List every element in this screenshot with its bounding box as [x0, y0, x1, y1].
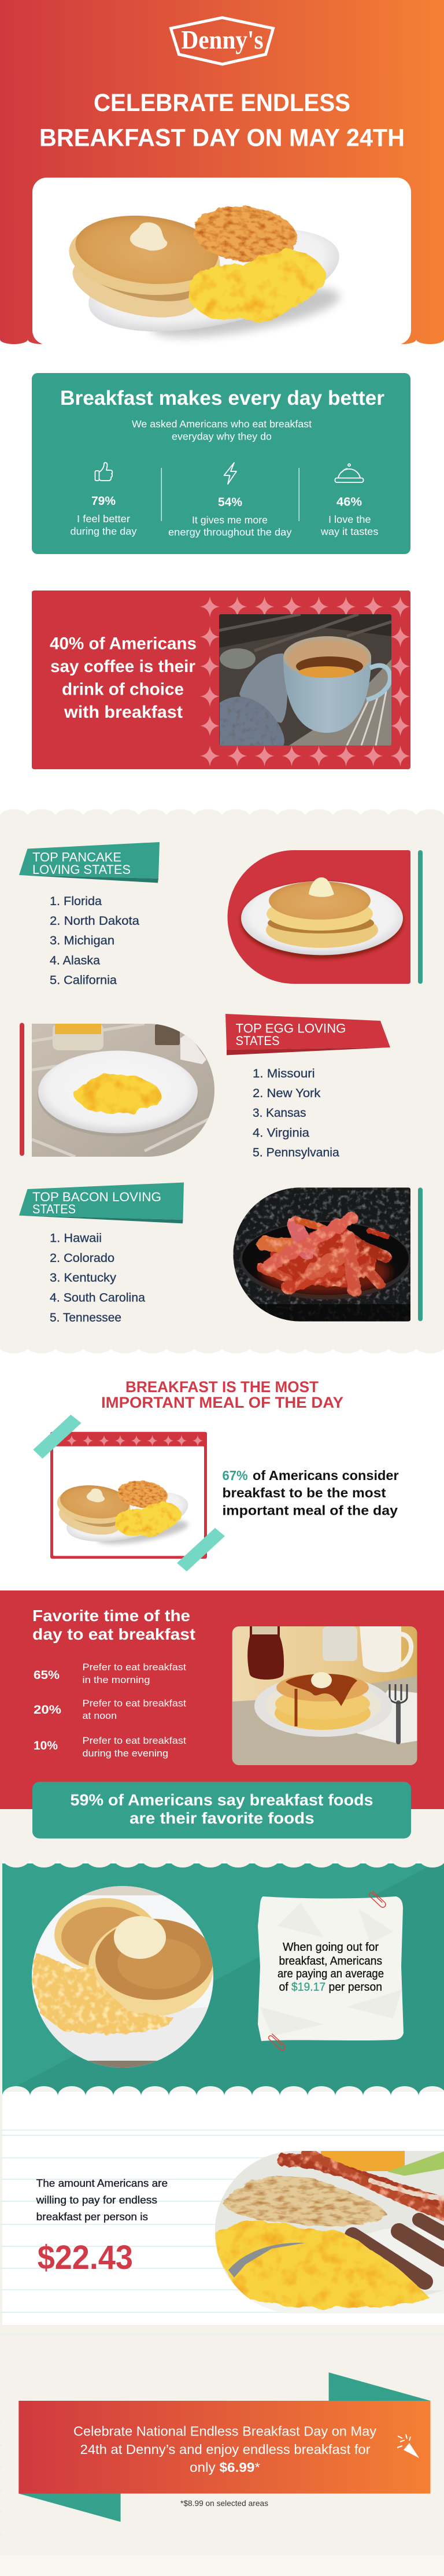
- white scallops on bottom edge: [2, 2086, 444, 2105]
- ribbon text: Celebrate National Endless Breakfast Day on May: [73, 2423, 376, 2438]
- card heading: Breakfast makes every day better: [60, 387, 384, 409]
- stat: 54%: [168, 496, 292, 538]
- panel: hero header: [0, 0, 444, 350]
- stat: 54%: It gives me more: [192, 514, 268, 526]
- teal background: [2, 1863, 444, 2101]
- list: egg states: 3. Kansas: [253, 1106, 306, 1120]
- ribbon fold: bottom left: [18, 2494, 121, 2522]
- section heading: day to eat breakfast: [32, 1625, 195, 1643]
- list: bacon states: [50, 1232, 145, 1324]
- banner: top pancake loving states: LOVING STATES: [32, 862, 131, 877]
- card background: [32, 591, 410, 769]
- stat: 65% morning: Prefer to eat breakfast: [82, 1662, 186, 1673]
- price: $22.43: $22.43: [38, 2239, 133, 2276]
- stat: 10% evening: Prefer to eat breakfast: [82, 1736, 186, 1746]
- callout text: say coffee is their: [50, 657, 195, 676]
- logo: Denny's: [171, 17, 273, 64]
- icon: thumbs up: [95, 463, 112, 481]
- banner: top egg loving states: [225, 1014, 390, 1055]
- frame inner area: [53, 1446, 204, 1556]
- text: 67% of Americans: breakfast to be the most: [222, 1485, 386, 1500]
- list: pancake states: 3. Michigan: [50, 934, 114, 947]
- note: torn paper card: breakfast, Americans: [279, 1955, 382, 1968]
- panel: framed breakfast photo: [33, 1415, 225, 1571]
- title: CELEBRATE ENDLESS: [94, 89, 350, 117]
- list: egg states: 1. Missouri: [253, 1067, 315, 1080]
- section heading: [32, 1607, 195, 1643]
- panel: willing to pay: [36, 2151, 444, 2313]
- photo: pancakes and eggs in a circle: [32, 1886, 213, 2069]
- stat: 79%: during the day: [71, 525, 137, 537]
- callout text: 40% of Americans: [50, 634, 197, 654]
- banner: top bacon loving states: TOP BACON LOVING: [32, 1190, 161, 1204]
- banner: top bacon loving states: STATES: [32, 1202, 76, 1216]
- photo: scrambled eggs on a plate: [32, 1024, 214, 1157]
- card intro text: [132, 418, 312, 442]
- ribbon fold: top right: [329, 2372, 430, 2401]
- stat: 65% morning: in the morning: [82, 1675, 150, 1685]
- photo: bacon on a dark plate: [233, 1187, 411, 1322]
- list: pancake states: 4. Alaska: [50, 954, 100, 967]
- icon: serving cloche: [335, 464, 363, 482]
- hero gradient band with scalloped edge: [0, 0, 444, 344]
- panel: closing ribbon: [18, 2372, 431, 2522]
- photo: pancakes, hash browns and eggs plate: [65, 201, 348, 350]
- ribbon text: 24th at Denny’s and enjoy endless breakfast for: [80, 2442, 371, 2457]
- banner: top bacon loving states: [19, 1182, 184, 1223]
- icon: party popper: [397, 2434, 419, 2458]
- note: torn paper card: When going out for: [283, 1941, 379, 1954]
- body text: [36, 2177, 168, 2223]
- banner: top egg loving states: TOP EGG LOVING: [236, 1021, 346, 1035]
- note: torn paper card: [258, 1896, 404, 2041]
- white photo panel: [32, 178, 411, 345]
- left cream strip: [0, 1809, 2, 2330]
- callout text: with breakfast: [64, 703, 183, 722]
- stat: 65% morning: [34, 1662, 186, 1685]
- stat: 10% evening: 10%: [34, 1739, 58, 1752]
- list: egg states: [253, 1067, 339, 1159]
- list: pancake states: [50, 895, 139, 987]
- stat: 10% evening: [34, 1736, 186, 1759]
- stat: 54%: energy throughout the day: [168, 526, 292, 538]
- note: torn paper card: are paying an average: [278, 1968, 384, 1980]
- photo: pancakes on red shape: [227, 850, 410, 984]
- stat: 54%: 54%: [218, 496, 242, 509]
- ribbon text: [73, 2423, 376, 2475]
- list: bacon states: 3. Kentucky: [50, 1271, 117, 1285]
- logo: Denny's: Denny's: [182, 25, 264, 54]
- section background with scallops: [0, 809, 444, 1353]
- text: 67% of Americans: [222, 1468, 399, 1518]
- list: bacon states: 2. Colorado: [50, 1252, 114, 1265]
- stat: 79%: 79%: [91, 494, 116, 508]
- ribbon body: [18, 2401, 431, 2494]
- stat: 10% evening: during the evening: [82, 1748, 168, 1759]
- accent bar: [418, 850, 423, 984]
- panel: top loving states section: [0, 809, 444, 1353]
- stat: 46%: [320, 495, 379, 537]
- photo: breakfast plate: [56, 1478, 193, 1551]
- callout: 59% of Americans: are their favorite foods: [130, 1809, 314, 1827]
- heading: breakfast is the most important meal: [101, 1378, 343, 1411]
- photo: coffee cup on stones: [219, 614, 391, 746]
- tape: bottom right: [177, 1528, 225, 1571]
- frame: [50, 1432, 207, 1559]
- list: pancake states: 5. California: [50, 974, 117, 987]
- list: bacon states: 1. Hawaii: [50, 1232, 102, 1245]
- cream background below: [0, 1809, 444, 1868]
- stat: 46%: I love the: [328, 514, 371, 525]
- callout text: [50, 634, 197, 722]
- red background: [0, 1590, 444, 1809]
- stat: 46%: way it tastes: [320, 526, 379, 537]
- section heading: Favorite time of the: [32, 1607, 190, 1625]
- list: egg states: 5. Pennsylvania: [253, 1146, 339, 1159]
- stat: 20% noon: 20%: [34, 1703, 61, 1717]
- card intro text: everyday why they do: [172, 431, 272, 442]
- ribbon text: only $6.99*: [190, 2460, 260, 2475]
- stat: 20% noon: at noon: [82, 1711, 117, 1721]
- stat: 46%: 46%: [336, 495, 362, 509]
- stat: 65% morning: 65%: [34, 1669, 60, 1682]
- tape: top left: [33, 1415, 82, 1459]
- photo: pancakes with syrup: [232, 1626, 417, 1765]
- panel: coffee callout: [32, 591, 410, 769]
- list: egg states: 2. New York: [253, 1087, 321, 1100]
- accent bar: [418, 1187, 423, 1321]
- note: torn paper card: of $19.17 per person: [279, 1981, 382, 1994]
- callout: 59% of Americans: 59% of Americans say breakfast foods: [71, 1791, 373, 1809]
- stat: 79%: [71, 494, 137, 537]
- icon: lightning bolt: [224, 463, 236, 484]
- darker diagonal tone: [2, 1858, 444, 2101]
- accent bar: [20, 1023, 24, 1156]
- text: 67% of Americans: important meal of the day: [222, 1503, 398, 1518]
- callout text: drink of choice: [62, 680, 184, 699]
- icon: paperclip top: [368, 1891, 387, 1909]
- banner: top pancake loving states: TOP PANCAKE: [32, 850, 121, 864]
- banner: top egg loving states: STATES: [236, 1034, 280, 1048]
- star pattern border: [200, 596, 410, 766]
- footnote: *$8.99 on selected areas: [180, 2499, 268, 2508]
- list: pancake states: 2. North Dakota: [50, 914, 139, 928]
- icon: paperclip bottom: [268, 2034, 286, 2051]
- heading: breakfast is the most important meal: IMPORTANT MEAL OF THE DAY: [101, 1394, 343, 1411]
- callout: 59% of Americans: [32, 1782, 411, 1839]
- panel: breakfast makes every day better: [32, 373, 410, 554]
- cream footer background: [0, 2325, 444, 2576]
- banner: top pancake loving states: [19, 842, 160, 883]
- stat: 79%: I feel better: [77, 513, 130, 525]
- photo: eggs, hash browns, bacon and sausage: [215, 2151, 444, 2313]
- cream scallops on top edge: [2, 1845, 444, 1868]
- heading: breakfast is the most important meal: BREAKFAST IS THE MOST: [125, 1378, 319, 1396]
- list: egg states: 4. Virginia: [253, 1126, 309, 1139]
- stat: 20% noon: Prefer to eat breakfast: [82, 1699, 186, 1709]
- stat: 20% noon: [34, 1699, 186, 1721]
- title: [39, 89, 405, 152]
- list: pancake states: 1. Florida: [50, 895, 102, 908]
- title: BREAKFAST DAY ON MAY 24TH: [39, 124, 405, 152]
- panel: favorite time of day: [0, 1590, 444, 1868]
- body text: The amount Americans are: [36, 2177, 168, 2189]
- text: 67% of Americans: 67%: [222, 1468, 247, 1483]
- list: bacon states: 5. Tennessee: [50, 1311, 121, 1324]
- card background: [32, 373, 410, 554]
- panel: average price per person: [2, 1863, 444, 2096]
- body text: breakfast per person is: [36, 2210, 148, 2223]
- text: 67% of Americans: of Americans consider: [253, 1468, 399, 1483]
- list: bacon states: 4. South Carolina: [50, 1291, 145, 1305]
- body text: willing to pay for endless: [36, 2194, 157, 2206]
- card intro text: We asked Americans who eat breakfast: [132, 418, 312, 430]
